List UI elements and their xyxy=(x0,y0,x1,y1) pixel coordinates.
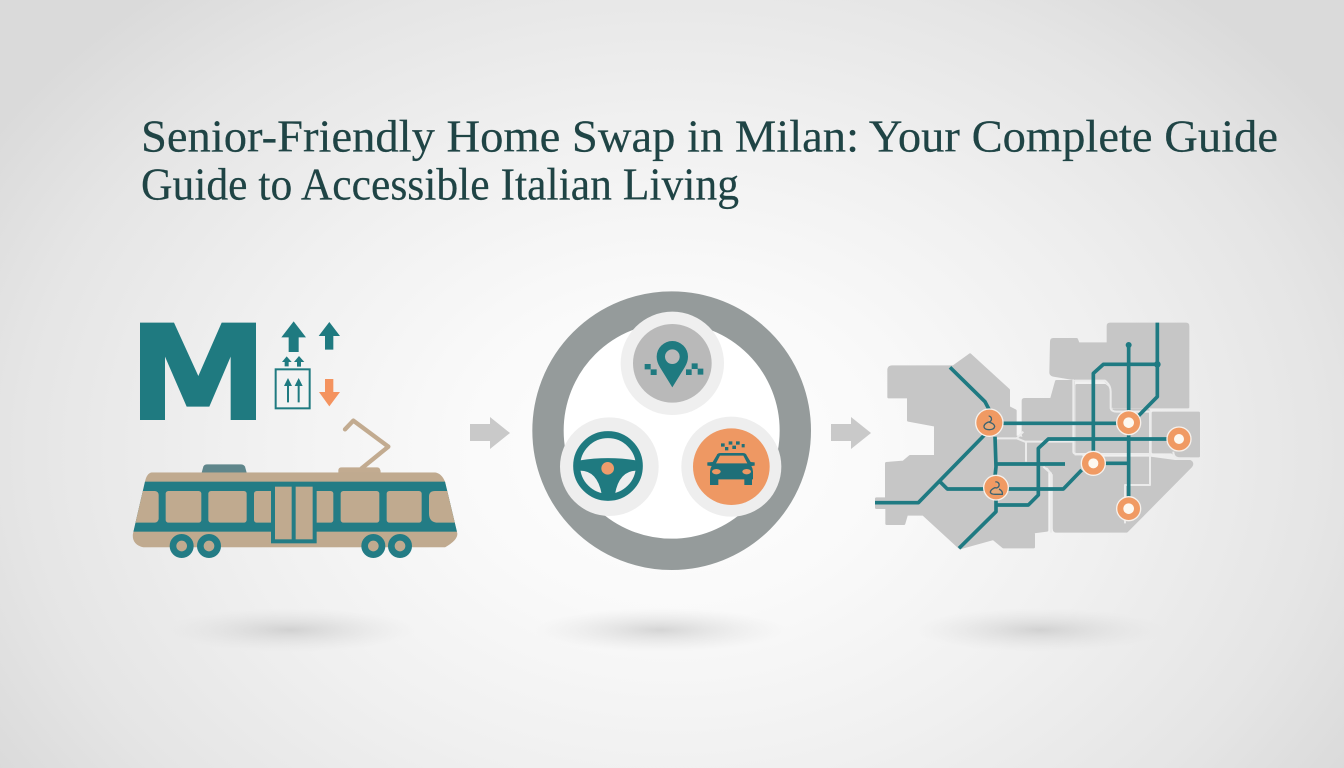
map streets xyxy=(997,379,1190,533)
icon: tram xyxy=(130,421,463,555)
map districts xyxy=(876,324,1199,548)
arrow: ride options to map xyxy=(831,417,871,449)
transit lines xyxy=(875,323,1167,548)
icon: elevator and direction arrows xyxy=(276,321,340,408)
icon: metro M xyxy=(140,323,256,420)
arrow: tram to ride options xyxy=(470,417,510,449)
floor shadows xyxy=(165,608,1165,652)
title xyxy=(141,110,1278,210)
icon: steering wheel xyxy=(560,417,659,516)
station: senior icon north xyxy=(976,409,1003,436)
title: Senior-Friendly Home Swap in Milan: Your Complete Guide xyxy=(141,110,1278,162)
panel: metro and tram xyxy=(130,321,463,555)
station markers xyxy=(1081,411,1191,521)
title: Guide to Accessible Italian Living xyxy=(141,158,739,210)
icon: taxi xyxy=(681,417,781,517)
outer ring xyxy=(548,307,795,554)
panel: Milan transit map xyxy=(875,323,1199,548)
icon: location pin with taxi checks xyxy=(621,312,724,415)
panel: ride options ring xyxy=(548,307,795,554)
station: senior icon south xyxy=(984,475,1008,500)
